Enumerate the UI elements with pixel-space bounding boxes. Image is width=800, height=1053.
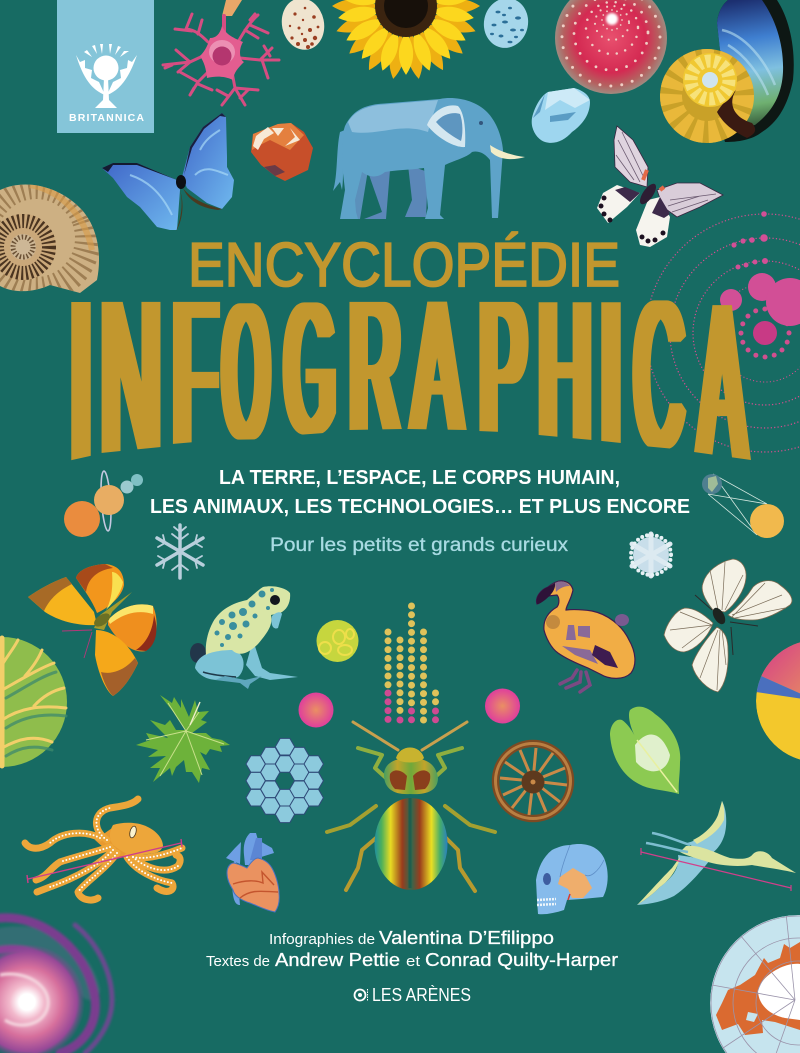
chart: solar system orbits (646, 211, 800, 452)
chart: dotted bars (388, 606, 436, 721)
icon: yellow butterfly (28, 564, 157, 696)
icon: wooden wheel (496, 744, 570, 818)
title: Infographica: A (699, 255, 746, 511)
icon: ammonite fossil (0, 184, 99, 293)
subtitle (150, 466, 690, 518)
icon: dodo (537, 581, 635, 692)
icon: beetle (327, 722, 495, 891)
title: Infographica: P (480, 260, 526, 479)
logo: Britannica (57, 0, 154, 133)
chart: pie (756, 640, 800, 762)
icon: pink ball right (485, 688, 520, 724)
icon: spiral galaxy (0, 918, 112, 1053)
title: Infographica (71, 300, 751, 460)
tagline: Pour les petits et grands curieux (270, 535, 569, 556)
icon: snowflake right (631, 534, 671, 576)
icon: leaf section (0, 637, 67, 767)
title: Infographica: G (285, 263, 335, 473)
credits: Conrad Quilty-Harper (425, 949, 618, 970)
icon: polar globe (710, 913, 800, 1053)
icon: snowflake left (157, 525, 203, 578)
icon: pink ball left (298, 692, 334, 728)
icon: pterosaur (637, 801, 796, 905)
credits: Andrew Pettie (275, 949, 400, 970)
title: Infographica: O (223, 265, 269, 480)
icon: large green leaf (610, 707, 680, 794)
credits: Infographies de (269, 931, 375, 948)
icon: poison dart frog (190, 586, 298, 689)
icon: swallowtail butterfly (597, 126, 723, 247)
icon: green pollen ball (316, 620, 358, 662)
logo: Britannica: BRITANNICA (69, 112, 144, 124)
icon: green star leaf (136, 695, 230, 783)
icon: ice crystal (532, 88, 590, 143)
subtitle: LES ANIMAUX, LES TECHNOLOGIES… ET PLUS ENCORE (150, 495, 690, 518)
icon: red dotted sphere (555, 0, 667, 94)
icon: heart (226, 833, 279, 912)
title: Infographica: F (173, 257, 217, 493)
title: Infographica: C (635, 258, 683, 493)
subtitle: LA TERRE, L’ESPACE, LE CORPS HUMAIN, (219, 466, 620, 489)
icon: speckled egg (277, 0, 329, 54)
icon: white butterfly (664, 559, 792, 692)
publisher logo: Les Arènes: LES ARÈNES (372, 984, 471, 1005)
title: Infographica: R (350, 260, 400, 475)
icon: neuron (163, 0, 279, 105)
credits: Valentina D’Efilippo (379, 927, 554, 948)
icon: elephant (333, 98, 525, 219)
icon: red mineral (251, 123, 313, 181)
title: Infographica: I (70, 252, 92, 515)
credits: Textes de (206, 953, 270, 970)
icon: skull (536, 844, 608, 914)
icon: blue egg (479, 0, 533, 52)
icon: sunflower (332, 0, 480, 80)
icon: octopus (25, 799, 182, 900)
title: Infographica: I (600, 257, 622, 491)
credits (206, 927, 618, 970)
icon: earth and sun diagram (702, 474, 784, 538)
title: Infographica: H (539, 257, 591, 488)
title: Infographica: A (413, 260, 462, 474)
icon: planets (64, 471, 143, 537)
icon: hexagon mirror (246, 738, 323, 823)
title: Encyclopédie: ENCYCLOPÉDIE (188, 231, 620, 300)
credits: et (406, 953, 421, 970)
title: Infographica: N (101, 253, 161, 504)
icon: blue morpho butterfly (102, 113, 234, 231)
icon: nautilus shell (660, 0, 794, 143)
